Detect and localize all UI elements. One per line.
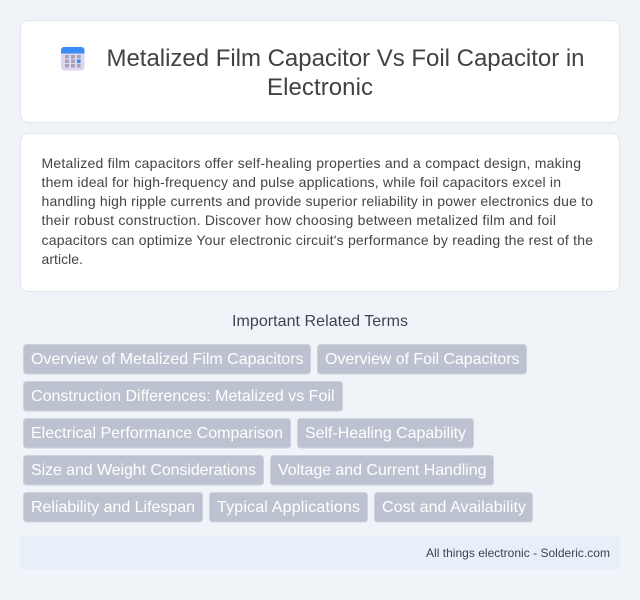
intro paragraph: them ideal for high-frequency and pulse applications, while foil capacitors excel in [42, 174, 561, 190]
intro paragraph: their robust construction. Discover how choosing between metalized film and foil [42, 212, 556, 228]
footer credit: All things electronic - Solderic.com [426, 546, 610, 560]
tag [24, 382, 342, 411]
tag: Reliability and Lifespan [31, 499, 195, 516]
tag [24, 492, 202, 522]
title: Metalized Film Capacitor Vs Foil Capacitor in [106, 45, 584, 72]
icon: calendar [61, 47, 84, 70]
title: Electronic [267, 74, 373, 101]
tag [24, 418, 290, 448]
tag: Voltage and Current Handling [278, 462, 486, 479]
intro paragraph [42, 155, 593, 267]
footer bar [20, 536, 620, 570]
tag: Overview of Foil Capacitors [325, 351, 520, 368]
tag [210, 492, 368, 522]
intro text panel [20, 134, 620, 292]
tag [318, 344, 526, 374]
title [106, 45, 584, 101]
header panel [20, 20, 620, 122]
tag: Size and Weight Considerations [31, 462, 256, 479]
intro paragraph: capacitors can optimize Your electronic circuit's performance by reading the rest of the [42, 232, 593, 248]
tag: Typical Applications [217, 499, 360, 516]
tag [374, 492, 532, 522]
intro paragraph: Metalized film capacitors offer self-healing properties and a compact design, making [42, 155, 581, 171]
tag: Overview of Metalized Film Capacitors [31, 351, 304, 368]
tag [270, 456, 494, 485]
tag [24, 456, 264, 485]
tag: Electrical Performance Comparison [31, 425, 283, 442]
related terms tags [24, 344, 532, 522]
related terms heading: Important Related Terms [232, 313, 408, 330]
tag [24, 344, 310, 374]
intro paragraph: article. [42, 251, 83, 267]
intro paragraph: handling high ripple currents and provide superior reliability in power electronics due to [42, 193, 593, 209]
tag: Cost and Availability [382, 499, 526, 516]
tag [298, 418, 474, 448]
tag: Self-Healing Capability [305, 425, 466, 442]
tag: Construction Differences: Metalized vs Foil [31, 388, 334, 405]
